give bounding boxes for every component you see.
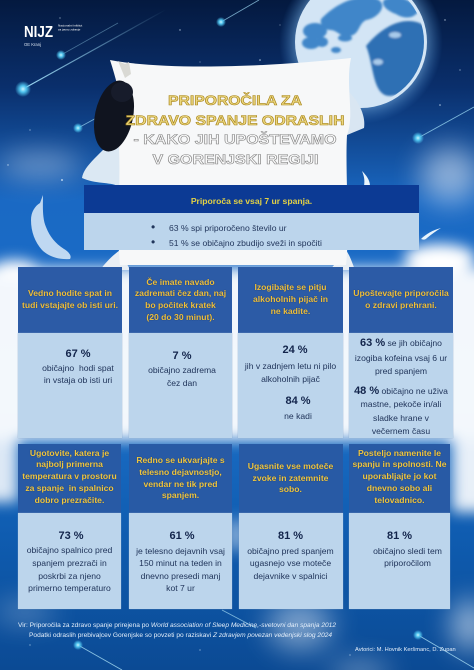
feathers <box>31 171 441 259</box>
panel: 7 hours statistics: 63 % spi priporočeno število ur <box>169 223 287 233</box>
card 3 body: 24 % <box>282 344 308 356</box>
card 8 header: telovadnico. <box>374 495 425 505</box>
logo NIJZ: Nacionalni inštitut <box>58 24 82 28</box>
card 3 body: alkoholnih pijač <box>261 374 320 384</box>
card 6 body: dnevno presedi manj <box>141 571 220 581</box>
panel: 7 hours statistics <box>84 213 419 250</box>
card 6 header: Redno se ukvarjajte s <box>136 455 225 465</box>
card 6 header: spanjem. <box>162 490 199 500</box>
title: ZDRAVO SPANJE ODRASLIH <box>126 113 344 128</box>
card 8 header: uporabljajte jo kot <box>362 471 436 481</box>
panel: 7 hours statistics: 51 % se običajno zbudijo sveži in spočiti <box>169 238 322 248</box>
card 2 header: (20 do 30 minut). <box>146 312 215 322</box>
card 6 body: 61 % <box>169 530 195 542</box>
card 7 body: običajno pred spanjem <box>247 546 334 556</box>
card 5 header <box>18 444 121 513</box>
card 6 body: je telesno dejavnih vsaj <box>136 546 225 556</box>
card 3 header: alkoholnih pijač in <box>253 294 328 304</box>
card 2 header: bo počitek kratek <box>145 300 216 310</box>
card 7 header: Ugasnite vse moteče <box>248 461 333 471</box>
source note <box>18 622 336 639</box>
card 7 body: dejavnike v spalnici <box>253 571 328 581</box>
card 3 body: jih v zadnjem letu ni pilo <box>245 361 336 371</box>
card 5 body: primerno temperaturo <box>28 583 111 593</box>
card 8 body: 81 % <box>387 530 412 542</box>
card 7 header: zvoke in zatemnite <box>253 473 328 483</box>
logo NIJZ: NIJZ <box>24 24 53 41</box>
card 4 body: 63 % se jih običajno <box>360 337 442 349</box>
card 8 header: spanju in spolnosti. Ne <box>352 459 447 469</box>
card 3 header: ne kadite. <box>271 306 310 316</box>
card 2 header <box>129 267 232 333</box>
card 1 body: običajno hodi spat <box>42 363 114 373</box>
logo NIJZ <box>24 24 82 47</box>
card 4 body: sladke hrane v <box>373 413 429 423</box>
card 6 header: telesno dejavnostjo, <box>139 467 222 477</box>
sleep mask <box>88 77 140 155</box>
card 7 body: ugasnejo vse moteče <box>250 558 331 568</box>
card 8 header: Posteljo namenite le <box>358 448 441 458</box>
card 3 header <box>238 267 343 333</box>
card 5 header: za spanje in spalnico <box>25 483 114 493</box>
panel: 7 hours statistics: • <box>151 235 155 249</box>
card 4 body: mastne, pekoče in/ali <box>361 399 441 409</box>
logo NIJZ: OE Kranj <box>24 42 41 47</box>
card 8 header: dnevno sobo ali <box>367 483 432 493</box>
source note: Podatki odraslih prebivalcev Gorenjske so povzeti po raziskavi Z zdravjem povezan vedenjski slog 2024 <box>29 632 332 639</box>
card 5 body: običajno spalnico pred <box>27 545 112 555</box>
pillow <box>82 58 364 270</box>
title: PRIPOROČILA ZA <box>168 93 302 108</box>
card 4 header <box>349 267 453 333</box>
card 6 body <box>129 513 232 609</box>
card 4 header: o zdravi prehrani. <box>365 300 437 310</box>
card 2 body: čez dan <box>167 378 197 388</box>
card 1 body: in vstaja ob isti uri <box>44 375 112 385</box>
card 6 header: vendar ne tik pred <box>143 478 218 488</box>
title: - KAKO JIH UPOŠTEVAMO <box>134 132 336 147</box>
moon <box>279 0 443 124</box>
card 3 body: ne kadi <box>284 411 312 421</box>
clouds <box>0 147 474 670</box>
card 5 body: 73 % <box>58 530 84 542</box>
card 4 body: večernem času <box>372 426 430 436</box>
card 4 body: izogiba kofeina vsaj 6 ur <box>355 353 447 363</box>
card 2 header: Če imate navado <box>146 277 215 287</box>
card 1 body <box>18 333 122 438</box>
logo NIJZ: za javno zdravje <box>58 28 81 32</box>
card 2 body <box>129 333 232 438</box>
card 4 body: 48 % običajno ne uživa <box>354 385 448 397</box>
card 2 body: običajno zadrema <box>148 365 216 375</box>
card 7 body: 81 % <box>278 530 303 542</box>
card 1 body: 67 % <box>65 348 91 360</box>
card 4 body <box>349 333 453 438</box>
title: V GORENJSKI REGIJI <box>152 152 318 167</box>
card 7 header <box>238 444 342 513</box>
panel: 7 hours statistics: • <box>151 220 155 234</box>
card 5 header: najbolj primerna <box>36 459 103 469</box>
card 2 header: zadremati čez dan, naj <box>135 288 226 298</box>
card 7 body <box>238 513 342 609</box>
card 1 header: Vedno hodite spat in <box>28 288 112 298</box>
source note: Vir: Priporočila za zdravo spanje prirejena po World association of Sleep Medicine,-svetovni dan spanja 2012 <box>18 622 336 629</box>
card 6 body: 150 minut na teden in <box>139 558 222 568</box>
card 5 body <box>18 513 121 609</box>
card 5 body: spanjem prezrači in <box>32 558 107 568</box>
panel: 7 hours headline <box>84 185 419 213</box>
panel: 7 hours headline: Priporoča se vsaj 7 ur spanja. <box>191 196 312 206</box>
card 1 header <box>18 267 122 333</box>
card 8 body: običajno sledi tem <box>373 546 442 556</box>
card 6 header <box>129 444 232 513</box>
card 8 body: priporočilom <box>384 558 431 568</box>
card 5 header: Ugotovite, katera je <box>30 448 109 458</box>
title <box>126 93 344 167</box>
card 3 body <box>238 333 343 438</box>
card 5 body: poskrbi za njeno <box>38 571 101 581</box>
authors: Avtorici: M. Hovnik Keršmanc, D. Zupan <box>355 647 456 653</box>
card 8 body <box>349 513 450 609</box>
card 1 header: tudi vstajajte ob isti uri. <box>22 300 118 310</box>
card 4 body: pred spanjem <box>375 366 427 376</box>
card 8 header <box>349 444 450 513</box>
card 6 body: kot 7 ur <box>166 583 195 593</box>
card 5 header: dobro prezračite. <box>35 495 104 505</box>
card 4 header: Upoštevajte priporočila <box>353 288 449 298</box>
card 5 header: temperatura v prostoru <box>22 471 117 481</box>
card 3 header: Izogibajte se pitju <box>254 282 327 292</box>
card 7 header: sobo. <box>279 484 302 494</box>
card 2 body: 7 % <box>173 350 191 362</box>
card 3 body: 84 % <box>285 395 311 407</box>
